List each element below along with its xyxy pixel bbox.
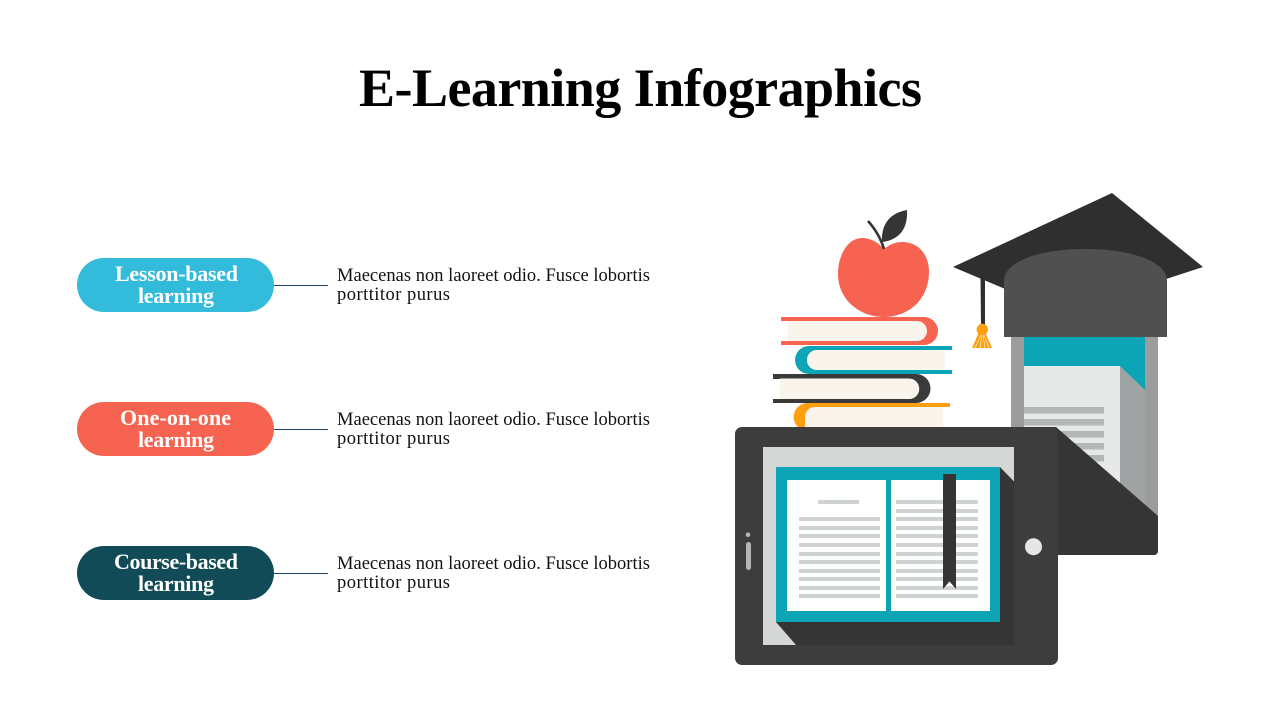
pill: lesson-based learning xyxy=(77,258,274,312)
icon: stack of books xyxy=(773,317,953,432)
pill: lesson-based learning: learning xyxy=(138,283,214,308)
pill: course-based learning xyxy=(77,546,274,600)
description text xyxy=(337,554,650,593)
screen shadow xyxy=(776,467,1014,645)
title: E-Learning Infographics xyxy=(359,58,922,118)
item: course-based learning xyxy=(77,546,650,600)
icon: rear document frame xyxy=(1011,330,1158,555)
icon: tablet xyxy=(735,427,1058,665)
pill: course-based learning: Course-based xyxy=(114,549,238,574)
pill: one-on-one learning xyxy=(77,402,274,456)
description text: porttitor purus xyxy=(337,429,450,449)
tablet home button xyxy=(1025,538,1042,555)
tablet screen xyxy=(763,447,1014,645)
connector line xyxy=(274,573,328,574)
pill: one-on-one learning: One-on-one xyxy=(120,405,231,430)
book: teal xyxy=(795,346,952,374)
connector line xyxy=(274,429,328,430)
description text: Maecenas non laoreet odio. Fusce lobortis xyxy=(337,554,650,574)
illustration: e-learning xyxy=(735,193,1203,665)
description text: Maecenas non laoreet odio. Fusce lobortis xyxy=(337,410,650,430)
description text: porttitor purus xyxy=(337,573,450,593)
book: orange xyxy=(794,403,953,432)
description text: porttitor purus xyxy=(337,285,450,305)
item: one-on-one learning xyxy=(77,402,650,456)
pill: course-based learning: learning xyxy=(138,571,214,596)
description text: Maecenas non laoreet odio. Fusce lobortis xyxy=(337,266,650,286)
icon: apple xyxy=(838,210,929,317)
description text xyxy=(337,410,650,449)
pill: lesson-based learning: Lesson-based xyxy=(115,261,238,286)
book: red xyxy=(781,317,938,345)
tablet camera and speaker xyxy=(746,532,751,570)
icon: graduation cap xyxy=(953,193,1203,348)
pill: one-on-one learning: learning xyxy=(138,427,214,452)
description text xyxy=(337,266,650,305)
open book xyxy=(776,467,1000,622)
item: lesson-based learning xyxy=(77,258,650,312)
book: dark xyxy=(773,374,930,403)
connector line xyxy=(274,285,328,286)
